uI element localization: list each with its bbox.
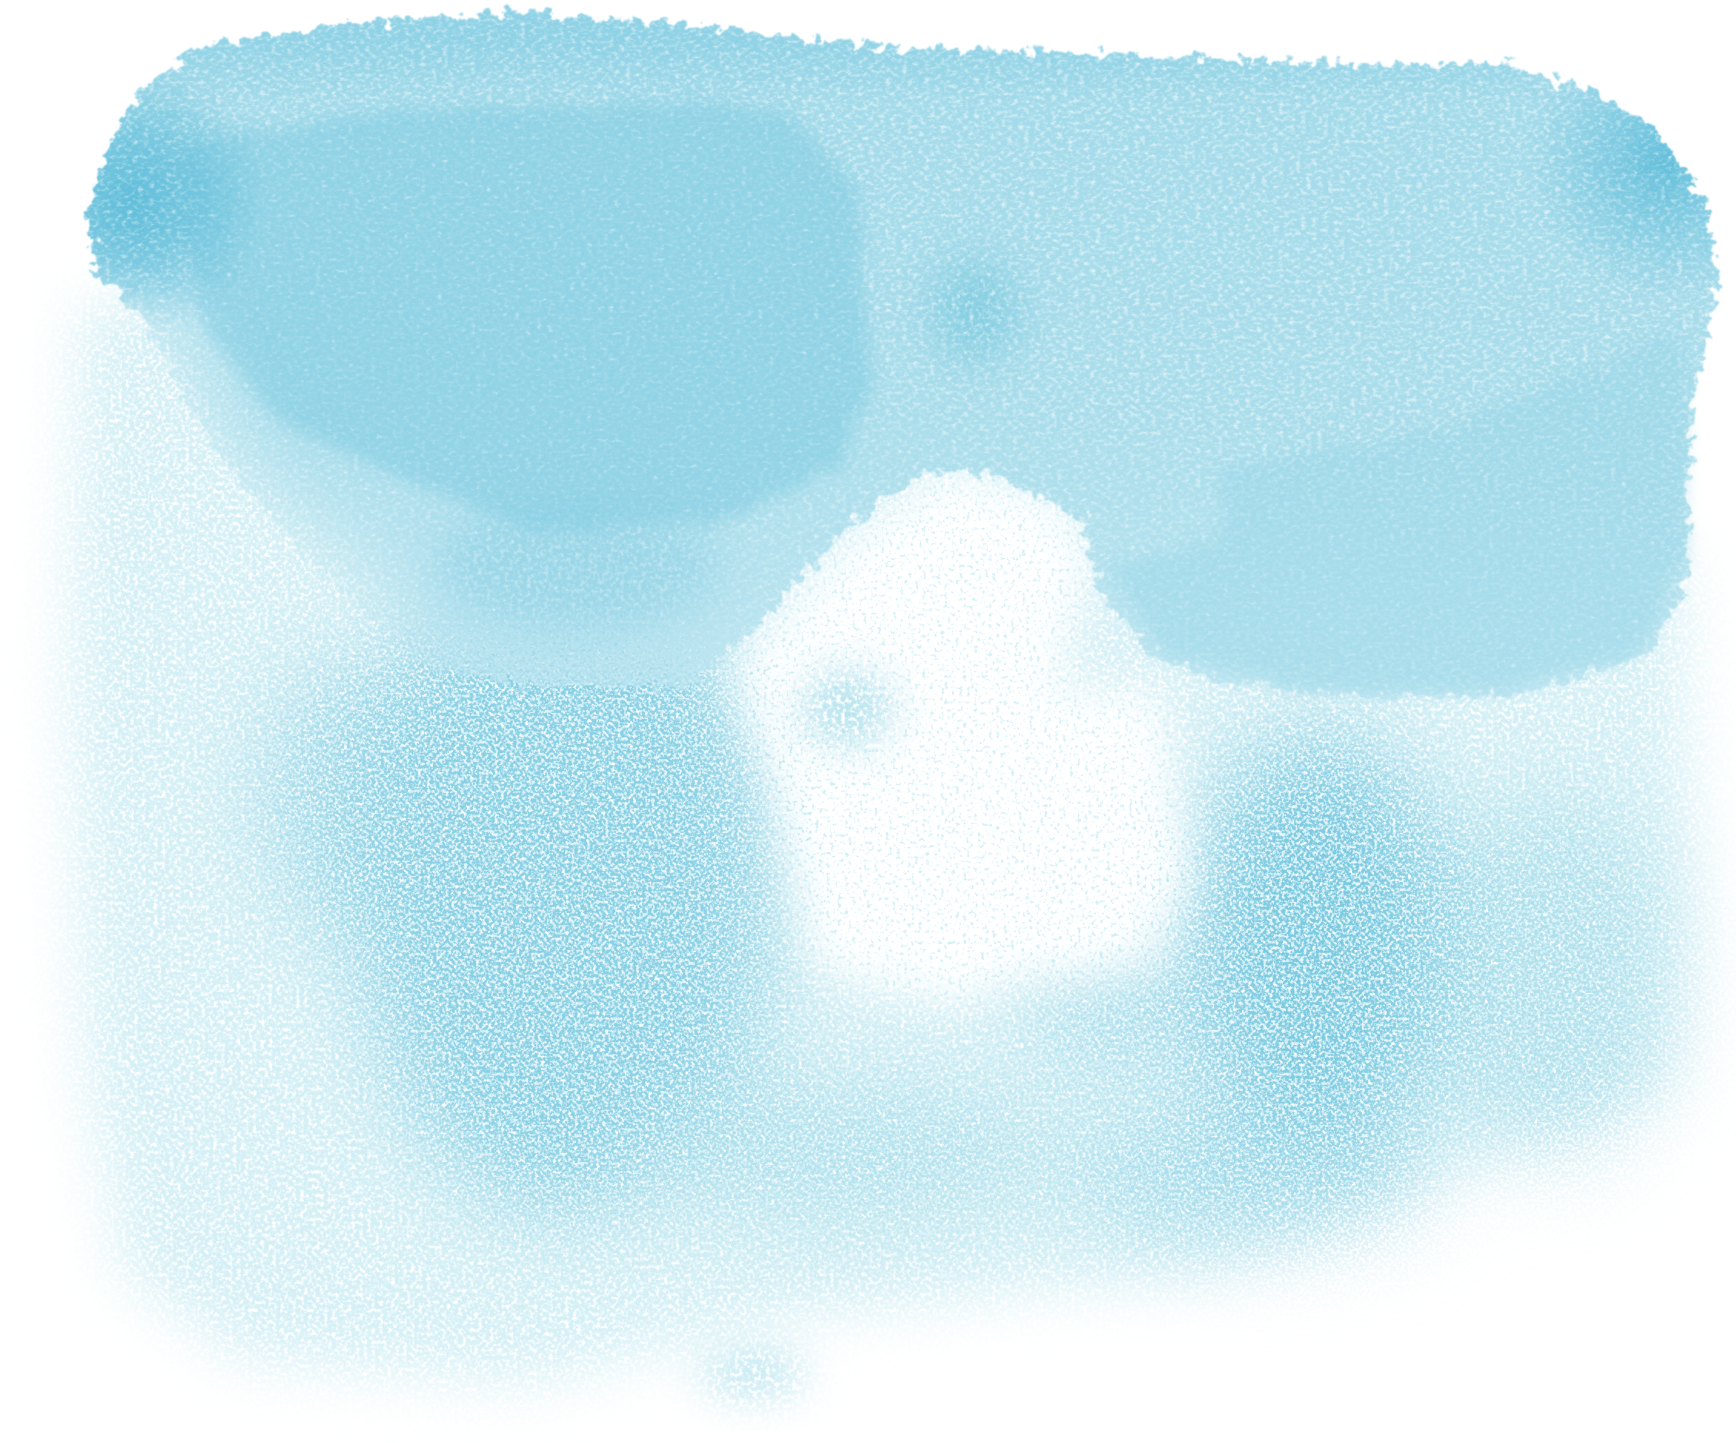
darker right overlapping blob <box>1107 332 1688 692</box>
darker left overlapping blob <box>188 102 869 532</box>
top wash band with rough edge <box>86 11 1718 698</box>
white bleached area <box>731 471 1190 1002</box>
pigment spot in bleached area <box>800 671 893 746</box>
pigment spot upper centre <box>930 257 1019 363</box>
speckled lower pigment <box>255 554 1672 1240</box>
dark corner top left <box>86 11 1718 698</box>
small stain lower left edge <box>698 1351 808 1395</box>
dark corner top right <box>86 11 1718 698</box>
lower pale wash <box>66 277 1694 1384</box>
lower lobe of left blob <box>432 498 720 631</box>
dark pigment along top edge <box>86 11 1718 698</box>
